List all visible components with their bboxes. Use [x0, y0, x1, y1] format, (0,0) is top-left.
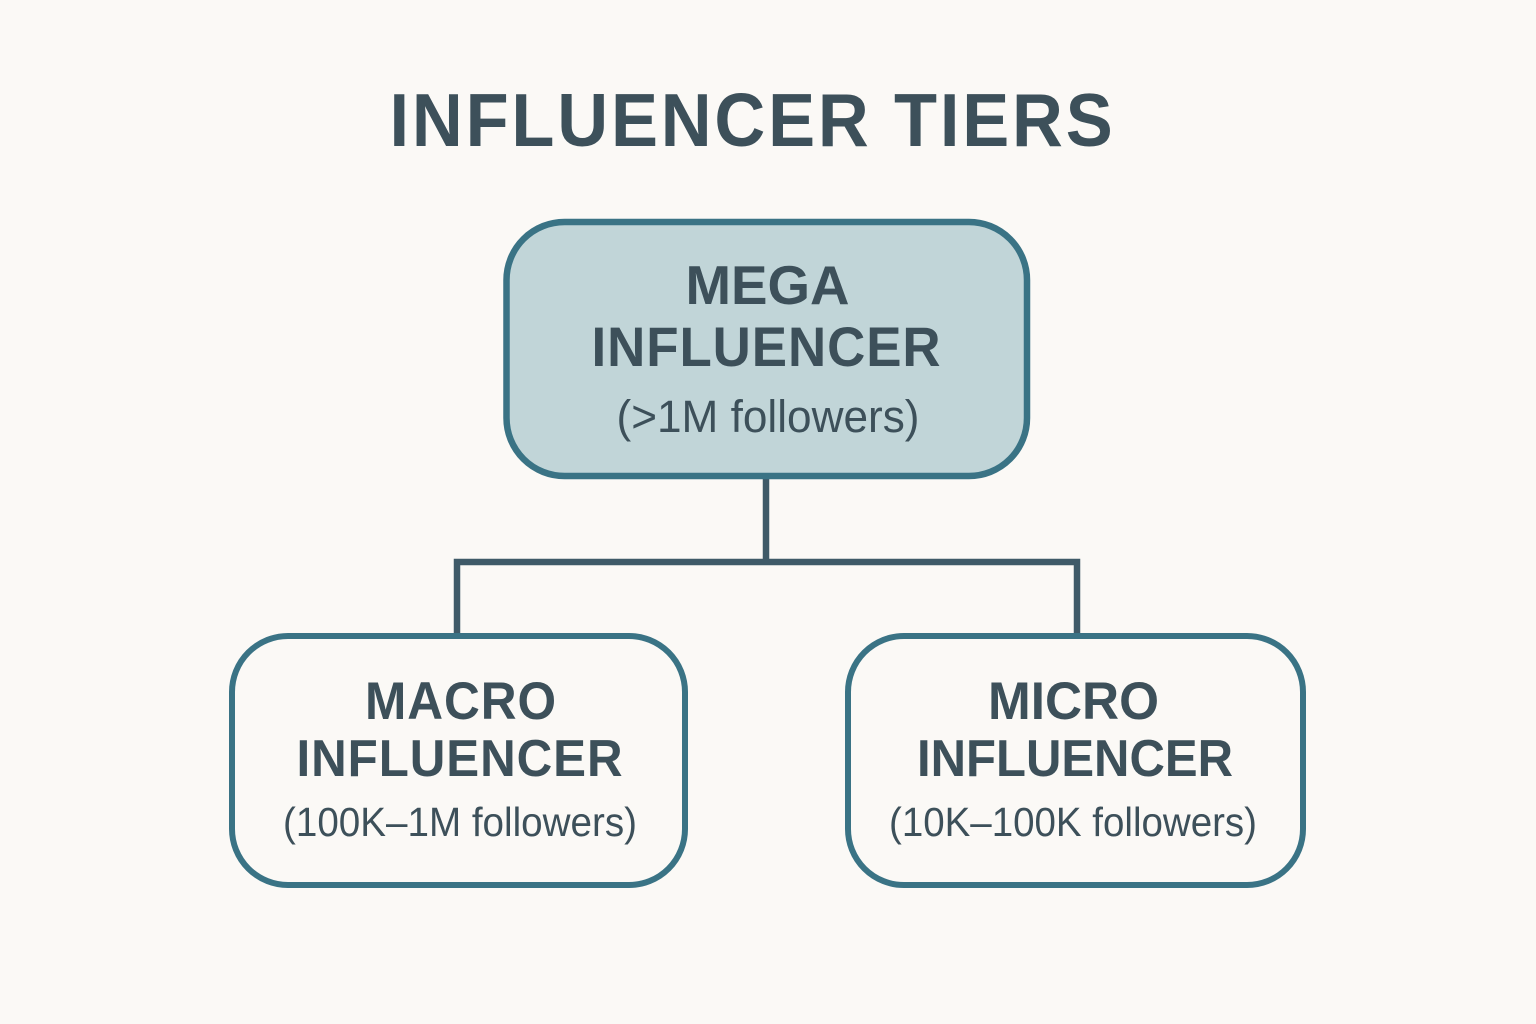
- panel: micro influencer: [848, 636, 1303, 885]
- heading: influencer: INFLUENCER: [296, 730, 624, 788]
- heading: influencer: INFLUENCER: [592, 315, 942, 378]
- heading: influencer: INFLUENCER: [917, 730, 1233, 788]
- panel: mega influencer: [506, 222, 1027, 476]
- heading: macro: MACRO: [365, 672, 557, 731]
- follower range: mega: (>1M followers): [616, 391, 920, 442]
- connector lines: [457, 476, 1077, 635]
- title: INFLUENCER TIERS: [390, 78, 1116, 162]
- follower range: macro: (100K–1M followers): [283, 799, 637, 845]
- heading: micro: MICRO: [988, 672, 1159, 731]
- follower range: micro: (10K–100K followers): [889, 799, 1257, 845]
- panel: macro influencer: [232, 636, 685, 885]
- heading: mega: MEGA: [686, 254, 850, 316]
